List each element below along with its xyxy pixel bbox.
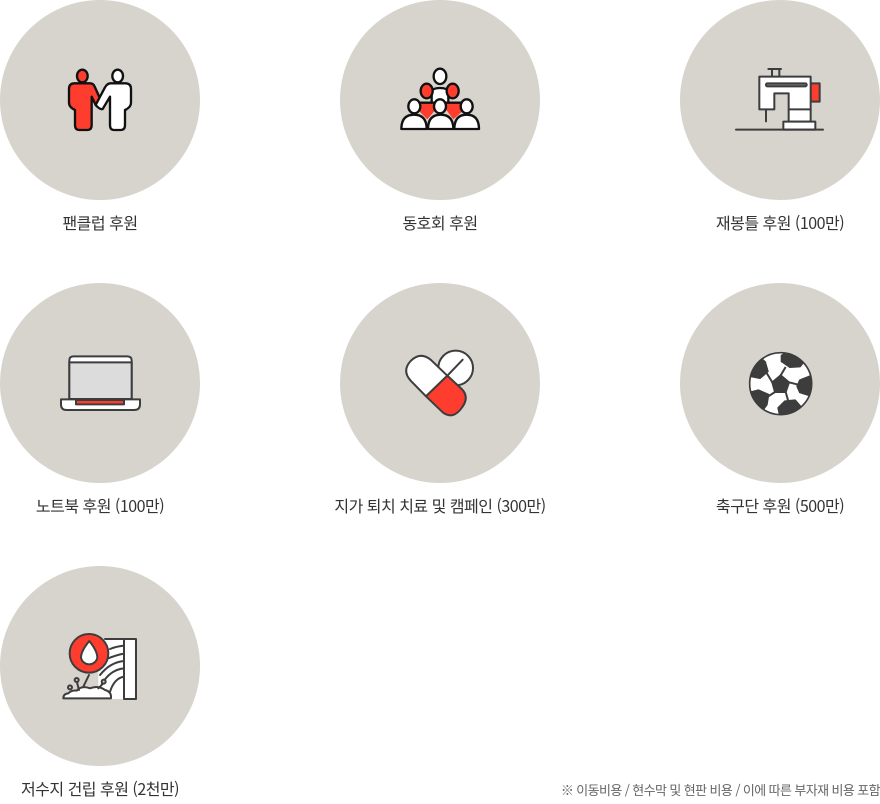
icon: reservoir with water drop — [63, 634, 136, 699]
icon: soccer ball — [748, 350, 815, 416]
background circle: reservoir — [0, 566, 200, 766]
background circle: fan club — [0, 0, 200, 200]
item: reservoir construction support — [0, 566, 200, 800]
item: campaign support — [334, 283, 546, 517]
background circle: campaign — [340, 283, 540, 483]
item: soccer team support — [680, 283, 880, 517]
background circle: club — [340, 0, 540, 200]
label: soccer team: 축구단 후원 (500만) — [716, 493, 844, 517]
icon: pills forming a heart — [406, 351, 473, 415]
icon: group of people — [401, 69, 479, 129]
icon: two people holding hands — [69, 70, 131, 130]
item: sewing machine support — [680, 0, 880, 234]
item: fan club support — [0, 0, 200, 234]
item: club support — [340, 0, 540, 234]
label: sewing machine: 재봉틀 후원 (100만) — [716, 210, 844, 234]
label: reservoir: 저수지 건립 후원 (2천만) — [21, 776, 179, 800]
background circle: soccer — [680, 283, 880, 483]
label: laptop: 노트북 후원 (100만) — [36, 493, 164, 517]
label: campaign: 지가 퇴치 치료 및 캠페인 (300만) — [334, 493, 546, 517]
footnote: ※ 이동비용 / 현수막 및 현판 비용 / 이에 따른 부자재 비용 포함 — [561, 780, 880, 799]
icon: laptop — [61, 356, 140, 410]
icon: sewing machine — [736, 69, 823, 130]
item: laptop support — [0, 283, 200, 517]
label: club: 동호회 후원 — [402, 210, 478, 234]
label: fan club: 팬클럽 후원 — [62, 210, 138, 234]
background circle: sewing machine — [680, 0, 880, 200]
background circle: laptop — [0, 283, 200, 483]
